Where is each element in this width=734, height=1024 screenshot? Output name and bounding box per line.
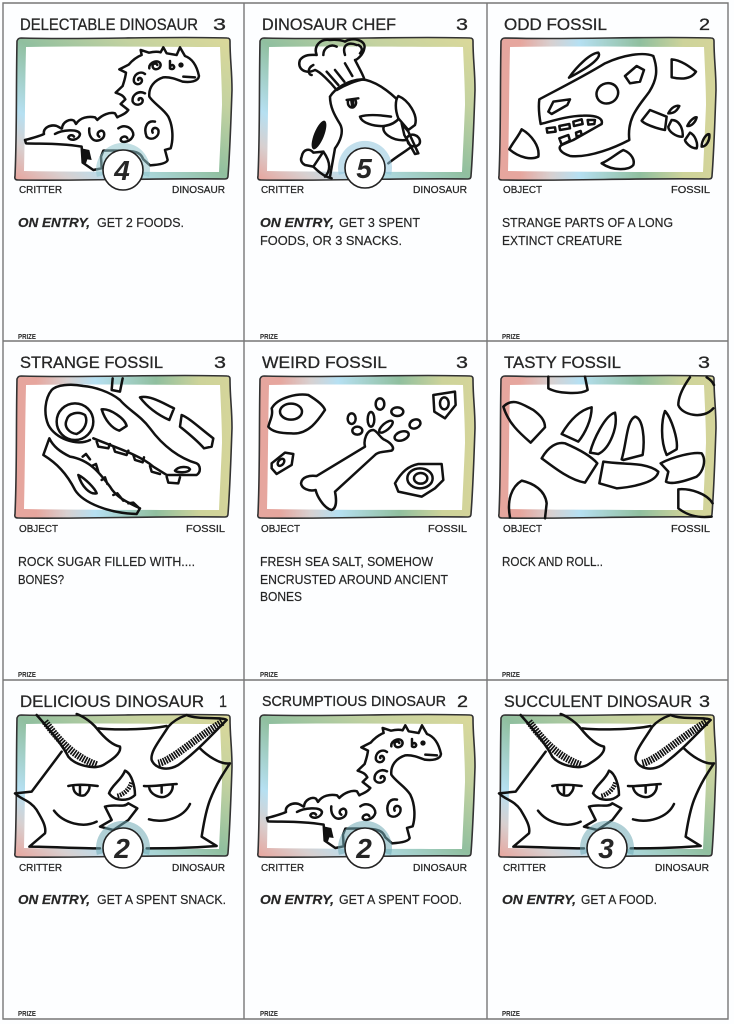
rules text: GET A FOOD.: [581, 893, 657, 907]
image frame: [499, 37, 716, 180]
cost: 1: [219, 692, 227, 711]
card: Dinosaur Chef: [258, 15, 475, 341]
cost: 3: [456, 15, 468, 34]
subtype label: DINOSAUR: [413, 185, 467, 196]
illustration: fossil jaw: [43, 378, 213, 514]
prize label: PRIZE: [260, 334, 278, 341]
strength badge: [342, 824, 388, 868]
rules text: ON ENTRY,: [18, 893, 90, 907]
rules text: GET 2 FOODS.: [97, 216, 184, 230]
prize label: PRIZE: [260, 672, 278, 679]
flavour text: ENCRUSTED AROUND ANCIENT: [260, 573, 448, 587]
image frame: [258, 714, 475, 857]
subtype label: DINOSAUR: [172, 863, 225, 874]
rules text: GET 3 SPENT: [339, 216, 420, 230]
flavour text: EXTINCT CREATURE: [502, 234, 622, 248]
prize label: PRIZE: [18, 1011, 36, 1018]
illustration: dinosaur: [267, 725, 441, 848]
rules text: FOODS, OR 3 SNACKS.: [260, 234, 402, 248]
image frame: [15, 37, 232, 180]
illustration: triceratops: [499, 714, 714, 848]
flavour text: BONES?: [18, 573, 64, 587]
strength badge: 2: [113, 833, 130, 864]
title: DELICIOUS DINOSAUR: [20, 692, 204, 711]
image frame: [499, 714, 716, 857]
illustration: dinosaur: [25, 47, 199, 170]
prize label: PRIZE: [502, 1011, 520, 1018]
strength badge: 5: [356, 153, 372, 184]
image frame: [15, 714, 232, 857]
subtype label: FOSSIL: [671, 185, 710, 196]
cost: 2: [457, 692, 468, 711]
card: Scrumptious Dinosaur: [258, 692, 475, 1018]
card: Strange Fossil: [15, 353, 232, 679]
illustration: chef dinosaur: [299, 39, 420, 178]
title: DELECTABLE DINOSAUR: [20, 15, 198, 34]
type label: CRITTER: [261, 863, 304, 874]
flavour text: BONES: [260, 590, 302, 604]
prize label: PRIZE: [502, 672, 520, 679]
rules text: GET A SPENT SNACK.: [97, 893, 226, 907]
type label: OBJECT: [503, 185, 542, 196]
title: SCRUMPTIOUS DINOSAUR: [262, 693, 446, 710]
prize label: PRIZE: [502, 334, 520, 341]
strength badge: 2: [355, 833, 372, 864]
illustration: bone and rocks: [268, 392, 456, 510]
type label: CRITTER: [503, 863, 546, 874]
cost: 3: [456, 353, 468, 372]
type label: OBJECT: [503, 524, 542, 535]
rules text: ON ENTRY,: [260, 216, 334, 230]
strength badge: [584, 824, 630, 868]
rules text: ON ENTRY,: [18, 216, 90, 230]
subtype label: FOSSIL: [671, 524, 710, 535]
strength badge: 3: [598, 833, 614, 864]
strength badge: [100, 146, 146, 190]
subtype label: FOSSIL: [428, 524, 467, 535]
flavour text: STRANGE PARTS OF A LONG: [502, 216, 673, 230]
flavour text: ROCK SUGAR FILLED WITH....: [18, 555, 195, 569]
subtype label: DINOSAUR: [172, 185, 225, 196]
strength badge: [341, 144, 388, 188]
type label: OBJECT: [19, 524, 58, 535]
rules text: GET A SPENT FOOD.: [339, 893, 462, 907]
cost: 3: [699, 692, 710, 711]
image frame: [258, 37, 475, 180]
cost: 3: [698, 353, 710, 372]
strength badge: 4: [113, 155, 130, 186]
type label: OBJECT: [261, 524, 300, 535]
title: ODD FOSSIL: [504, 15, 607, 34]
strength badge: [100, 824, 146, 868]
flavour text: FRESH SEA SALT, SOMEHOW: [260, 555, 433, 569]
title: TASTY FOSSIL: [504, 353, 621, 372]
card: Weird Fossil: [258, 353, 475, 679]
cost: 2: [699, 15, 710, 34]
flavour text: ROCK AND ROLL..: [502, 555, 603, 569]
title: DINOSAUR CHEF: [262, 15, 396, 34]
cost: 3: [214, 353, 226, 372]
type label: CRITTER: [261, 185, 304, 196]
rules text: ON ENTRY,: [502, 893, 576, 907]
rules text: ON ENTRY,: [260, 893, 334, 907]
subtype label: FOSSIL: [186, 524, 225, 535]
card: Odd Fossil: [499, 15, 716, 341]
image frame: [15, 375, 232, 518]
image frame: [258, 375, 475, 518]
prize label: PRIZE: [18, 334, 36, 341]
title: STRANGE FOSSIL: [20, 353, 163, 372]
illustration: triceratops: [15, 714, 230, 848]
card: Delicious Dinosaur: [15, 692, 232, 1018]
type label: CRITTER: [19, 863, 62, 874]
card: Tasty Fossil: [499, 353, 716, 679]
type label: CRITTER: [19, 185, 62, 196]
card: Delectable Dinosaur: [15, 15, 232, 341]
prize label: PRIZE: [18, 672, 36, 679]
title: WEIRD FOSSIL: [262, 353, 387, 372]
title: SUCCULENT DINOSAUR: [504, 692, 692, 711]
image frame: [499, 375, 716, 518]
card: Succulent Dinosaur: [499, 692, 716, 1018]
illustration: fossil skull: [509, 53, 709, 169]
cost: 3: [213, 15, 226, 34]
subtype label: DINOSAUR: [655, 863, 709, 874]
prize label: PRIZE: [260, 1011, 278, 1018]
subtype label: DINOSAUR: [413, 863, 467, 874]
illustration: fossil fragments: [503, 377, 714, 518]
